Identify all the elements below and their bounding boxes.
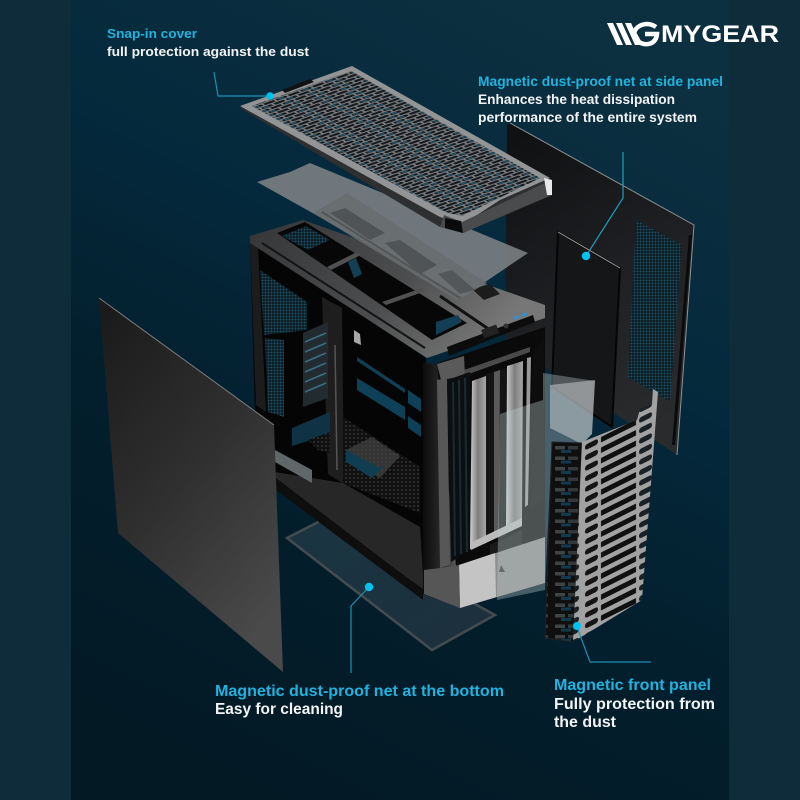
panel: left side panel	[99, 298, 283, 672]
callout: snap-in cover: full protection against the dust	[107, 44, 310, 59]
base front	[459, 537, 545, 608]
callout: front panel	[554, 622, 715, 731]
panel: magnetic front panel	[545, 389, 658, 642]
expansion slots	[303, 322, 328, 407]
dust-proof net on side panel	[552, 232, 620, 427]
brand mark	[499, 565, 505, 572]
callout: snap-in cover: Snap-in cover	[107, 26, 197, 41]
case side interior	[250, 240, 426, 594]
logo: MYGEAR	[607, 21, 779, 48]
case: main chassis	[250, 220, 545, 608]
plate: translucent glass	[550, 380, 595, 444]
top face	[250, 220, 545, 358]
callout: side panel net: Magnetic dust-proof net at side panel	[478, 74, 723, 89]
logo: MYGEAR: MYGEAR	[661, 21, 779, 48]
front I/O ports	[447, 312, 535, 356]
light bars	[470, 376, 486, 549]
frame posts	[250, 240, 266, 412]
glass: front translucent panel	[497, 373, 595, 600]
callout: bottom net: Magnetic dust-proof net at the bottom	[215, 683, 504, 700]
callout: front panel: Fully protection from	[554, 696, 715, 713]
plate: translucent top filter	[257, 163, 528, 300]
blue openings	[357, 357, 405, 393]
callout: side panel net: performance of the entire system	[478, 110, 697, 125]
front panel grille	[573, 389, 658, 642]
callout: side panel net: Enhances the heat dissipation	[478, 92, 675, 107]
callout: front panel: Magnetic front panel	[554, 677, 711, 694]
lower side	[275, 472, 424, 590]
panel: bottom dust net	[287, 520, 495, 650]
front column	[423, 362, 460, 608]
front vent	[447, 372, 472, 562]
callout: front panel: the dust	[554, 714, 616, 731]
panel: snap-in top cover	[240, 66, 552, 233]
panel: rear side panel	[505, 123, 694, 455]
case floor	[343, 417, 420, 513]
mesh vent	[628, 220, 682, 402]
power button	[472, 284, 500, 300]
callout: snap-in cover	[107, 26, 310, 100]
callout: bottom net	[215, 583, 504, 718]
callout: side panel net	[478, 74, 723, 260]
rear mesh vent	[260, 270, 307, 335]
lower bracket	[470, 518, 522, 550]
callout: bottom net: Easy for cleaning	[215, 701, 343, 718]
front panel dark face	[545, 442, 582, 642]
